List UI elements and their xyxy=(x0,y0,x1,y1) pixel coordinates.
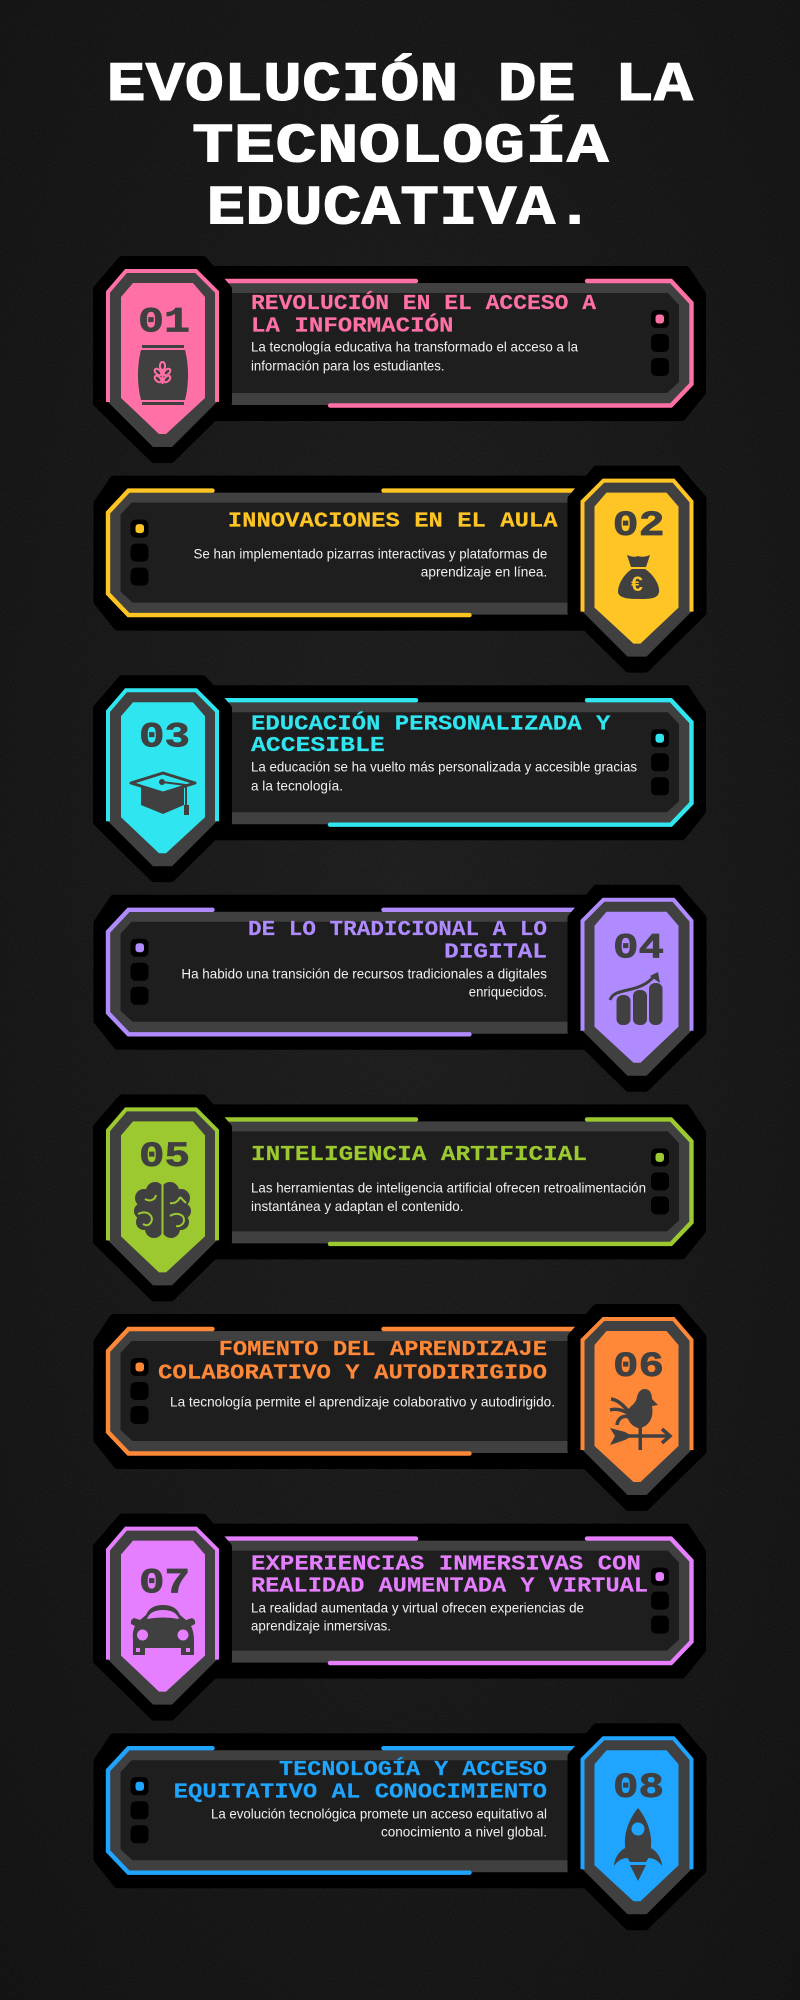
heading: EXPERIENCIAS INMERSIVAS CON xyxy=(251,1553,641,1576)
panel frame and badge xyxy=(98,1727,702,1926)
icon: money bag xyxy=(618,555,659,599)
body text: La educación se ha vuelto más personalizada y accesible gracias xyxy=(251,759,637,775)
heading: DE LO TRADICIONAL A LO xyxy=(248,919,547,942)
heading: TECNOLOGÍA Y ACCESO xyxy=(279,1758,547,1782)
panel: 01 revolución en el acceso xyxy=(97,260,702,459)
number 04: 04 xyxy=(613,928,664,968)
body text xyxy=(251,1180,646,1214)
title xyxy=(106,53,693,240)
body text xyxy=(181,965,547,1000)
heading: EDUCACIÓN PERSONALIZADA Y xyxy=(251,712,611,736)
heading: ACCESIBLE xyxy=(251,735,385,758)
body text: información para los estudiantes. xyxy=(251,358,444,374)
number 02: 02 xyxy=(613,506,665,546)
icon: growth chart xyxy=(610,972,662,1025)
number 07: 07 xyxy=(139,1563,190,1603)
number 08: 08 xyxy=(613,1768,664,1808)
body text: instantánea y adaptan el contenido. xyxy=(251,1198,464,1214)
panel frame and badge xyxy=(97,260,702,459)
panel frame and badge xyxy=(97,1098,702,1297)
body text: La tecnología educativa ha transformado el acceso a la xyxy=(251,339,578,355)
heading: REVOLUCIÓN EN EL ACCESO A xyxy=(251,292,596,316)
panel frame and badge xyxy=(98,1308,702,1507)
icon: graduation cap xyxy=(131,773,195,815)
body text xyxy=(251,1599,584,1634)
body text: enriquecidos. xyxy=(469,984,547,1000)
body text xyxy=(211,1805,547,1840)
body text: aprendizaje en línea. xyxy=(421,564,547,580)
body text: La realidad aumentada y virtual ofrecen experiencias de xyxy=(251,1599,584,1615)
body text: La tecnología permite el aprendizaje colaborativo y autodirigido. xyxy=(170,1394,555,1410)
panel frame and badge xyxy=(97,1518,702,1717)
panel: 08 tecnología y acceso equitativo xyxy=(98,1727,702,1926)
heading xyxy=(251,1553,648,1599)
heading xyxy=(158,1339,547,1385)
title: EVOLUCIÓN DE LA xyxy=(106,53,693,117)
number 06: 06 xyxy=(613,1347,664,1387)
panel: 06 fomento del aprendizaje xyxy=(98,1308,702,1507)
panel frame and badge xyxy=(98,889,702,1088)
heading xyxy=(248,919,547,965)
body text: Ha habido una transición de recursos tradicionales a digitales xyxy=(181,965,547,981)
body text: a la tecnología. xyxy=(251,778,343,794)
heading: LA INFORMACIÓN xyxy=(251,315,454,339)
body text xyxy=(251,339,578,374)
heading: DIGITAL xyxy=(444,942,547,965)
body text xyxy=(251,759,637,794)
body text xyxy=(194,545,547,580)
icon: brain xyxy=(134,1182,191,1238)
icon: rooster weather vane xyxy=(610,1389,670,1450)
icon: sack of grain xyxy=(138,345,188,405)
panel: 02 innovaciones en el aula xyxy=(98,470,702,669)
heading xyxy=(174,1758,547,1805)
number 03: 03 xyxy=(139,718,190,758)
number 01: 01 xyxy=(138,303,190,343)
panel frame and badge xyxy=(97,679,702,878)
title: EDUCATIVA. xyxy=(206,176,594,240)
icon: car xyxy=(131,1605,195,1655)
title: TECNOLOGÍA xyxy=(192,115,609,179)
body text: conocimiento a nivel global. xyxy=(381,1824,547,1840)
heading: EQUITATIVO AL CONOCIMIENTO xyxy=(174,1782,547,1805)
body text: Se han implementado pizarras interactivas y plataformas de xyxy=(194,545,547,561)
panel: 05 inteligencia artificial xyxy=(97,1098,702,1297)
body text: La evolución tecnológica promete un acceso equitativo al xyxy=(211,1805,547,1821)
panel: 04 de lo tradicional a lo digital xyxy=(98,889,702,1088)
panel frame and badge xyxy=(98,470,702,669)
number 05: 05 xyxy=(139,1137,190,1177)
heading xyxy=(251,712,611,758)
icon: rocket xyxy=(614,1808,662,1881)
body text: Las herramientas de inteligencia artificial ofrecen retroalimentación xyxy=(251,1180,646,1196)
panel: 07 experiencias inmersivas xyxy=(97,1518,702,1717)
heading: INNOVACIONES EN EL AULA xyxy=(228,511,558,534)
heading xyxy=(251,292,596,339)
body text: aprendizaje inmersivas. xyxy=(251,1618,391,1634)
icon: money bag: € xyxy=(631,573,643,596)
heading: FOMENTO DEL APRENDIZAJE xyxy=(219,1339,547,1362)
heading: INTELIGENCIA ARTIFICIAL xyxy=(251,1144,587,1167)
panel: 03 educación personalizada xyxy=(97,679,702,878)
heading: REALIDAD AUMENTADA Y VIRTUAL xyxy=(251,1576,648,1599)
heading: COLABORATIVO Y AUTODIRIGIDO xyxy=(158,1362,547,1385)
